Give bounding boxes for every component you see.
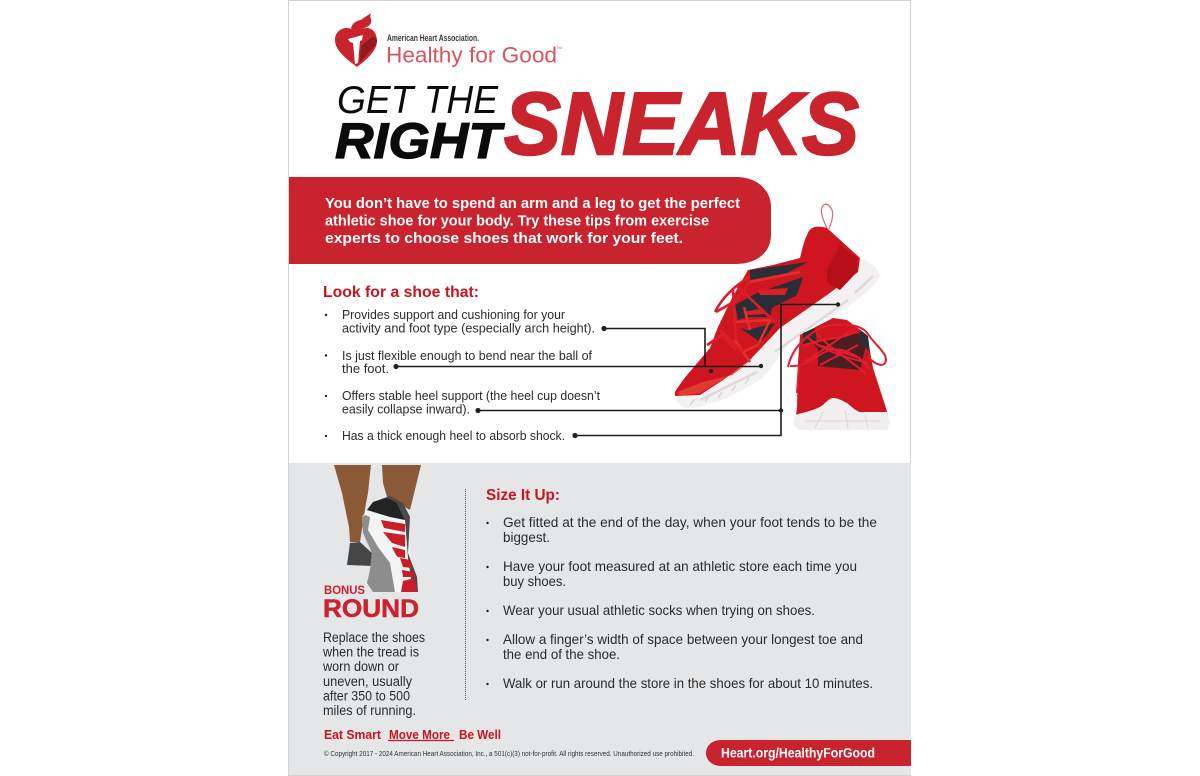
heel black	[367, 498, 405, 520]
tip 3: Wear your usual athletic socks when trying on shoes.	[503, 603, 815, 618]
bonus round text: miles of running.	[323, 703, 416, 718]
shoe: front view	[788, 318, 890, 430]
logo text: Healthy for Good: Healthy for Good	[386, 42, 557, 68]
sole	[673, 258, 880, 408]
banner text: athletic shoe for your body. Try these tips from exercise	[325, 212, 709, 230]
copyright: © Copyright 2017 - 2024 American Heart Association, Inc., a 501(c)(3) not-for-profit. All rights reserved. Unauthorized use prohibited.	[324, 750, 694, 758]
icon: legs and shoe tread	[334, 465, 421, 592]
logo: American Heart Association Healthy for Good	[335, 13, 562, 68]
website text: Heart.org/HealthyForGood	[721, 746, 875, 760]
icon: heart and torch	[335, 13, 377, 67]
mudguard	[677, 362, 750, 396]
callout lines to shoe	[393, 302, 840, 438]
tip 4: Allow a finger’s width of space between your longest toe and	[503, 632, 863, 647]
red tread bars	[381, 520, 405, 532]
tagline: Eat Smart Move More Be Well: Eat Smart	[324, 728, 382, 742]
tagline: Eat Smart Move More Be Well: Be Well	[459, 728, 501, 742]
tip 1	[486, 515, 877, 545]
shoe: side view	[673, 204, 880, 408]
website button	[706, 740, 911, 766]
tagline: Eat Smart Move More Be Well: Move More	[389, 728, 450, 742]
bonus round text: Replace the shoes	[323, 630, 425, 645]
tip 2: buy shoes.	[503, 574, 566, 589]
dark mesh panels	[750, 262, 808, 280]
toe cap sole	[793, 398, 890, 430]
tip 4: the end of the shoe.	[503, 647, 620, 662]
dark tongue	[803, 328, 818, 350]
list item 1	[325, 307, 595, 336]
list item 2: the foot.	[342, 361, 389, 376]
laces	[788, 324, 886, 393]
pull loop	[821, 204, 833, 229]
list item 1: Provides support and cushioning for your	[342, 307, 566, 322]
list: sizing tips	[486, 515, 877, 691]
title	[335, 74, 859, 173]
right leg	[382, 465, 421, 510]
tip 2: Have your foot measured at an athletic store each time you	[503, 559, 857, 574]
section heading: Look for a shoe that: Look for a shoe that:	[323, 284, 479, 301]
bottom gray panel	[289, 463, 911, 775]
list item 2: Is just flexible enough to bend near the ball of	[342, 348, 592, 363]
list item 3: Offers stable heel support (the heel cup doesn’t	[342, 388, 600, 403]
bonus round text: worn down or	[322, 659, 400, 674]
tip 1: biggest.	[503, 530, 550, 545]
list: shoe features	[325, 307, 600, 443]
title: SNEAKS: SNEAKS	[504, 74, 859, 173]
text: BONUS: BONUS	[324, 585, 365, 597]
heel counter	[827, 245, 858, 290]
laces	[707, 277, 775, 352]
upper	[796, 318, 888, 415]
tip 5: Walk or run around the store in the shoes for about 10 minutes.	[503, 676, 873, 691]
bonus round text: uneven, usually	[323, 674, 412, 689]
list item 4: Has a thick enough heel to absorb shock.	[342, 428, 565, 443]
list item 2	[325, 348, 592, 376]
intro banner	[289, 177, 771, 264]
banner shape	[289, 177, 771, 264]
section heading: Size It Up: Size It Up:	[486, 487, 560, 504]
bonus round text	[322, 630, 425, 718]
photo: red running shoes	[673, 204, 890, 430]
overlay stripes	[733, 272, 800, 362]
bonus round text: after 350 to 500	[323, 688, 410, 704]
trademark: TM	[556, 45, 562, 50]
outer shoe edge	[373, 496, 418, 592]
tip 2	[486, 559, 857, 589]
list item 3	[325, 388, 600, 416]
text: ROUND: ROUND	[323, 595, 419, 623]
page background	[288, 0, 910, 776]
left leg	[334, 465, 371, 542]
left shoe	[347, 542, 373, 566]
list item 1: activity and foot type (especially arch height).	[342, 320, 595, 336]
upper	[675, 227, 860, 396]
list item 3: easily collapse inward).	[342, 402, 470, 416]
sole base	[362, 510, 417, 592]
bonus round text: when the tread is	[322, 644, 419, 660]
tip 1: Get fitted at the end of the day, when your foot tends to be the	[503, 515, 877, 530]
tip 4	[486, 632, 863, 662]
vertical divider	[464, 489, 466, 700]
grey tread	[362, 515, 395, 592]
banner text	[325, 195, 740, 247]
tagline: Eat Smart Move More Be Well	[324, 728, 501, 742]
logo text: American Heart Association: American Heart Association.	[387, 33, 479, 43]
banner text: You don’t have to spend an arm and a leg to get the perfect	[325, 195, 740, 212]
title: RIGHT: RIGHT	[335, 113, 506, 169]
bonus round heading	[323, 585, 419, 623]
title: GET THE: GET THE	[337, 79, 499, 122]
banner text: experts to choose shoes that work for your feet.	[325, 230, 683, 247]
